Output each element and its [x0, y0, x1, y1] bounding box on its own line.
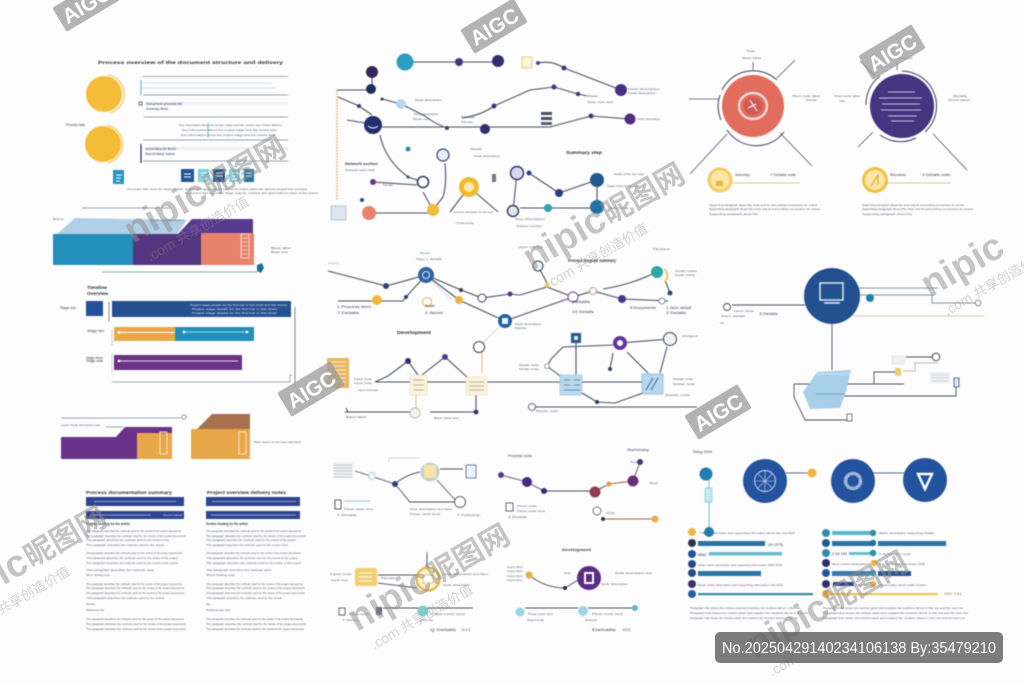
flow: upper left: Flow note text — [344, 507, 373, 511]
labels: top right: Short label — [948, 98, 971, 102]
flow: upper right: Top — [630, 460, 637, 464]
flow: lower right: Input item — [507, 565, 524, 569]
flow: lower left: Items — [421, 618, 434, 622]
chart: layered 3D block: Block note — [271, 250, 288, 254]
text column: left: This paragraph describes the methods used for the review of the — [86, 538, 169, 542]
watermark: AIGC badges: AIGC — [690, 390, 747, 437]
watermark: nipic marks: nipic — [914, 225, 1011, 306]
chart: horizontal bars — [60, 285, 295, 387]
watermark: nipic marks: 昵图网 — [421, 519, 516, 592]
list: rules and pale bands: Document process list — [146, 102, 182, 106]
list: rules and pale bands: Key information about the project stage and the review step — [182, 128, 277, 132]
text column: left: This paragraph describes the methods used for the review of the project — [86, 561, 178, 565]
labels: middle network: Node notes — [675, 273, 696, 277]
labels: top right: Short label — [742, 56, 761, 60]
text column: left: This paragraph describes the methods used for the review of the project documents — [86, 534, 186, 538]
labels: middle network: Base label — [346, 415, 366, 419]
labels: top right: Supporting paragraph about this circle and its surrounding connections for review — [709, 207, 821, 211]
heading: top-left panel: Process overview of the document structure and delivery — [98, 60, 284, 65]
list: right metrics: 1 Summary note — [879, 552, 911, 556]
list: right metrics: 2 24 102 — [832, 552, 847, 556]
watermark: nipic marks: .com — [368, 623, 402, 652]
text column: left: Section heading for the article — [86, 522, 130, 526]
text column: right: This paragraph describes the methods used for the review of the project documents — [206, 582, 303, 586]
chart: horizontal bars: Stage three — [86, 356, 103, 360]
watermark: nipic marks: 共享创造价值 — [572, 220, 650, 274]
chart: horizontal bars: Overview — [87, 291, 108, 296]
flow: lower right: Input item — [507, 574, 524, 578]
icon: yellow circle two — [85, 125, 123, 163]
labels: middle network: 7 Details — [337, 311, 359, 315]
labels: hub: Item detail — [721, 314, 746, 318]
labels: top right: Supporting paragraph about this circle and its surrounding connections for review — [862, 203, 965, 207]
diagram: blue circles row — [743, 458, 947, 503]
labels: top network: Node — [461, 115, 476, 119]
labels: top network: Outcome — [456, 221, 474, 225]
labels: middle network: Detail note — [673, 382, 696, 386]
list: left metrics — [688, 528, 813, 598]
flow: lower right: Input item — [507, 569, 524, 573]
chart: layered 3D block: Block top — [53, 217, 64, 221]
flow: lower left: Flow note — [349, 612, 369, 616]
list: rules and pale bands — [139, 76, 288, 163]
chart: lower blocks — [61, 414, 301, 459]
text column: right: Note — [206, 602, 210, 606]
labels: middle network: Details — [572, 300, 590, 304]
labels: top right: 7 Details note — [770, 173, 796, 177]
network: middle centre — [327, 245, 698, 420]
labels: middle network: Input note — [354, 381, 372, 385]
labels: top network: Node description — [474, 154, 500, 158]
chart: horizontal bars: Project stage details for the first bar in this chart — [192, 307, 277, 311]
watermark: image id pill: No.20250429140234106138 By:35479210 — [722, 640, 996, 657]
all panels — [53, 49, 984, 632]
watermark: nipic marks: 昵图网 — [197, 131, 292, 204]
text column: right: This paragraph describes the methods used for the review — [206, 596, 283, 600]
labels: top network: Node — [470, 147, 483, 151]
list: right metrics: Summary and total notes 1030 — [879, 562, 925, 566]
labels: middle network: Route note — [536, 409, 558, 413]
nodes: right route — [528, 332, 676, 410]
labels: middle network: Node note — [519, 367, 539, 371]
connectors: top network — [337, 62, 630, 213]
list: left metrics: 7 Metric description and supporting information about this row 2024 — [699, 531, 795, 535]
flow: upper left: Flow description text here — [410, 507, 452, 511]
list: right metrics: Total — [857, 583, 870, 587]
labels: hub: Item note — [734, 309, 755, 313]
connectors: upper route — [328, 266, 670, 373]
labels: top network: Node description — [637, 117, 660, 121]
flow: lower left — [330, 552, 488, 632]
text column: left: This paragraph describes the methods used for the review — [86, 543, 165, 547]
text column: left: Short closing note — [86, 573, 110, 577]
connectors: hub — [732, 288, 984, 420]
labels: top network: Network section — [345, 162, 378, 166]
flow: lower right: Details — [592, 628, 616, 632]
flow: lower right: Development — [562, 548, 592, 552]
watermark: AIGC badges — [52, 0, 926, 440]
labels: middle network: Process diagram summary — [568, 258, 616, 263]
labels: top right: Summary — [735, 173, 750, 177]
flow: lower left: Node description — [443, 583, 470, 587]
flow: upper right: Note — [606, 511, 615, 515]
text column: left: Process documentation summary — [86, 490, 173, 495]
labels: top network — [345, 87, 660, 228]
flow: lower left: Flow note text — [431, 612, 465, 616]
icons: yellow coins — [708, 167, 951, 193]
list: rules and pale bands: Secondary list items — [145, 147, 176, 151]
flow: upper right — [498, 448, 658, 522]
labels: top right: 3 Details note — [922, 173, 950, 177]
flow: lower right: Note — [564, 571, 571, 575]
chart: lower blocks: Block caption for the lower right block — [254, 440, 301, 444]
icon: blue folder shape — [803, 370, 851, 409]
watermark: nipic marks: 昵图网 — [819, 546, 914, 619]
flow: lower right: Flow note text — [592, 612, 623, 616]
panel: bottom left flows — [330, 448, 658, 632]
labels: middle network: Input summary — [358, 388, 378, 392]
labels: top network: Summary step — [566, 150, 602, 155]
paragraphs: metrics: Paragraph that closes the metrics panel and explains the numbers above in this row — [690, 616, 799, 620]
caption: under tiles — [127, 187, 319, 195]
text column: left: This paragraph describes the methods used for the review of the project documents — [86, 582, 182, 586]
labels: hub: 01 — [720, 321, 724, 325]
watermark: nipic marks: 昵图网 — [18, 501, 113, 574]
text column: right: Section heading for the article — [206, 522, 248, 526]
labels: top right: Title — [746, 49, 756, 53]
text column: right: This paragraph describes the methods used for the review of the project documents — [206, 617, 303, 621]
diagram: purple circle — [858, 61, 967, 170]
labels: middle network: Upper note text — [518, 245, 543, 249]
labels: top network: Step note text — [587, 100, 613, 104]
text column: right: This paragraph describes the methods used — [206, 568, 271, 572]
watermark: nipic marks: 共享创造价值 — [397, 581, 475, 635]
watermark: AIGC badges: AIGC — [466, 4, 523, 51]
list: right metrics: Item metric description — [832, 562, 869, 566]
watermark: nipic marks: nipic — [738, 586, 836, 667]
labels: middle network: Note — [425, 304, 435, 308]
flow: lower left: Note — [381, 576, 396, 580]
caption: under tiles: Document tiles show the stage outputs, reviews and approvals for each of the teams — [185, 191, 319, 195]
watermark: nipic marks: .com — [144, 235, 178, 264]
chart: layered 3D block — [53, 208, 291, 273]
labels: top network: Node description — [414, 112, 438, 116]
watermark: nipic marks: .com — [941, 289, 975, 318]
list: rules and pale bands: Secondary notes — [145, 152, 175, 156]
chart: horizontal bars: Timeline — [87, 285, 107, 290]
watermark: nipic marks: .com — [543, 262, 577, 291]
labels: middle network: 2 Items — [425, 311, 443, 315]
text column: right: This paragraph describes the methods used for the review of the project documents — [206, 586, 305, 590]
list: left metrics: Mid — [698, 553, 706, 557]
list: left metrics: Basic metric description and supporting information row 2020 — [698, 583, 783, 587]
flow: upper right: Summary — [627, 448, 649, 452]
text column: left: This paragraph describes the methods used for the review of the project documents — [86, 529, 181, 533]
flow: upper left — [333, 458, 481, 517]
text column: left: This paragraph describes the methods used for the review — [86, 596, 165, 600]
labels: top right: Short node label — [834, 94, 860, 98]
labels: middle network: Node notes — [675, 269, 698, 273]
labels: middle network — [328, 245, 698, 420]
flow: lower right: 302 — [622, 628, 631, 632]
flow: lower left: Q Details — [430, 628, 456, 632]
icons: top network documents — [331, 57, 552, 220]
labels: hub: 3 Details — [759, 312, 778, 316]
text column: right: This paragraph describes the methods used for the review of the project — [206, 556, 298, 560]
chart: layered 3D block: Block middle section — [150, 218, 184, 222]
nodes: upper route — [372, 261, 672, 352]
flow: lower left: Input note — [330, 572, 353, 576]
small nodes: hub — [724, 294, 981, 421]
text column: left: Reference list — [86, 608, 104, 612]
panel: top-left circles and lists — [66, 60, 319, 195]
labels: middle network: Node description — [515, 322, 541, 326]
labels: top network: Step description — [515, 217, 545, 221]
paragraphs: metrics: Paragraph that closes the metrics panel and explains the numbers above in this row and the next row — [823, 611, 969, 615]
labels: middle network: Input — [328, 261, 339, 265]
text column: left: This paragraph describes the methods used for the review of the project documents — [86, 551, 182, 555]
labels: middle network: Step 1 details — [416, 257, 443, 261]
labels: middle network: 1 Item detail — [666, 306, 691, 310]
label: circle two: Process data — [66, 123, 85, 127]
labels: middle network: Input note — [354, 377, 372, 381]
labels: top right: Supporting paragraph about this circle and its surrounding connections for review — [709, 203, 818, 207]
chart: horizontal bars: Stage note — [86, 359, 103, 363]
labels: middle network: 10 Details — [572, 310, 594, 314]
flow: lower right: Input item — [507, 578, 524, 582]
list: rules and pale bands: Key information about the project stage and the review step — [181, 133, 275, 137]
icon: yellow circle one — [86, 75, 124, 113]
flow: lower left: Node description text here — [443, 572, 488, 576]
paragraphs: metrics: Paragraph that closes the metrics panel and explains the numbers above in this row — [690, 606, 801, 610]
labels: middle network: Detail note — [665, 393, 691, 397]
labels: hub — [720, 309, 778, 325]
labels: middle network: Node note — [519, 363, 539, 367]
labels: top right: Details — [953, 94, 968, 98]
labels: top right: Review — [890, 173, 907, 177]
labels: top right: Short node label — [792, 94, 820, 98]
watermark: image id pill — [715, 632, 1003, 663]
paragraphs: metrics — [690, 606, 969, 620]
labels: top network: Detail of the middle node — [607, 184, 639, 188]
list: right metrics: Metric description supporting details — [879, 531, 935, 535]
text column: left: Notes — [86, 602, 96, 606]
labels: middle network: 5 Documents — [630, 306, 656, 310]
panel: monitor hub — [720, 268, 984, 421]
flow: upper right: Process note — [508, 454, 532, 458]
paragraphs: metrics: Paragraph that closes the metrics panel and explains the numbers above in this row — [690, 611, 809, 615]
list: left metrics: 20 CFTs — [768, 543, 783, 547]
list: rules and pale bands: Summary items — [146, 107, 168, 111]
panel: top right circles — [689, 49, 974, 216]
chart: horizontal bars: Stage one — [60, 306, 76, 310]
labels: middle network: Base label text — [434, 416, 459, 420]
paragraphs: metrics: Paragraph that closes the metrics panel and explains the numbers above in this row and the next row — [823, 606, 964, 610]
labels: middle network: 1 Process item — [337, 305, 371, 309]
labels: top right: Supporting paragraph about this — [862, 212, 913, 216]
flow: upper left: 7 Followup — [457, 513, 481, 517]
watermark: nipic marks: nipic — [516, 198, 613, 279]
connectors: right route — [532, 338, 697, 407]
labels: middle network: Notes — [653, 247, 671, 251]
watermark: AIGC badges: AIGC — [283, 367, 340, 414]
labels: top network: Note — [461, 120, 474, 124]
icons: document tiles — [113, 169, 254, 184]
paragraphs: metrics: Paragraph that closes the metrics panel and explains the numbers above in this row and the next row — [823, 616, 966, 620]
watermark: AIGC badges: AIGC — [864, 30, 921, 77]
watermark: nipic marks: .com — [766, 650, 800, 679]
chart: horizontal bars: Project stage details for the first bar in this chart and the review — [190, 303, 288, 307]
labels: middle network: Output — [682, 334, 698, 338]
chart: horizontal bars: Project stage details for the first bar in this chart — [192, 311, 277, 315]
chart: layered 3D block: Block label — [271, 246, 291, 250]
chart: horizontal bars: Stage two — [87, 329, 104, 333]
labels: top network: Step — [587, 94, 599, 98]
diagram: coral circle — [689, 60, 812, 174]
text column: right: This paragraph describes the methods used for the review of the project — [206, 538, 296, 542]
text column: left: This paragraph describes the methods used for the review of the project documents — [86, 622, 186, 626]
list: left metrics: Other metric description and supporting information 2024 1030 — [698, 563, 782, 567]
documents: lower route — [327, 354, 487, 418]
text column: right: This paragraph describes the methods used for the review of the project documents — [206, 591, 305, 595]
watermark: nipic marks: 共享创造价值 — [173, 193, 251, 247]
caption: under tiles: Document tiles show the stage outputs, reviews and approvals for each of the teams within the delivery programme overview — [127, 187, 308, 191]
labels: middle network: Development — [397, 330, 432, 335]
labels: top network: Network notes here — [345, 168, 375, 172]
chain: left column — [693, 450, 714, 537]
nodes: top network — [357, 54, 636, 220]
watermark: nipic marks: nipic — [116, 171, 214, 252]
watermark: nipic marks: nipic — [340, 559, 438, 640]
flow: lower left: 311 — [461, 628, 471, 632]
network: top centre — [331, 54, 660, 228]
flow: upper left: Flow note text — [410, 512, 440, 516]
chart: lower blocks: Lower block description text — [61, 423, 100, 427]
labels: top right: Supporting paragraph about this circle and its surrounding connections for review — [862, 207, 974, 211]
text column: left: This paragraph describes the methods used for the review of the project — [86, 556, 178, 560]
icon: monitor circle — [804, 268, 860, 324]
flow: lower right: Node description text — [615, 571, 652, 575]
text column: right: This paragraph describes the methods used for the review of the project documents — [206, 627, 304, 631]
flow: lower left: 7 Items — [342, 618, 360, 622]
labels: top right — [709, 49, 974, 216]
labels: middle network: Note — [420, 251, 431, 255]
labels: top network: Step note — [516, 224, 543, 228]
labels: top network: Note — [383, 183, 394, 187]
connectors: lower route — [345, 357, 645, 412]
list: right metrics: 000 161 — [944, 592, 962, 596]
labels: top network: Detail of the top node — [614, 172, 644, 176]
flow: upper right: Step — [649, 481, 658, 485]
flow: lower right: Node description — [601, 582, 628, 586]
labels: top right: Note — [806, 98, 818, 102]
text column: right: This paragraph describes the methods used for the review of the — [206, 543, 288, 547]
labels: top network: Base node — [609, 206, 629, 210]
text column: right: Reference list — [206, 608, 230, 612]
flow: upper right: Flow note text — [517, 509, 545, 513]
text column: left: Overview — [163, 513, 183, 517]
flow: lower right: Items — [585, 618, 598, 622]
text column: right — [206, 490, 306, 631]
text column: right: This paragraph describes the methods used for the review of the project documents — [206, 551, 301, 555]
list: right metrics: Summary and total notes — [879, 583, 927, 587]
text column: left: This paragraph describes the methods used for the review of the project documents — [86, 586, 184, 590]
text column: left — [86, 490, 186, 631]
flow: lower right: Items — [527, 618, 545, 622]
labels: top right: Short label — [895, 56, 912, 60]
labels: middle network: 2 Details — [666, 311, 686, 315]
text column: right: This paragraph describes the methods used for the review of the project documents — [206, 534, 306, 538]
labels: middle network: Detail note — [673, 377, 693, 381]
labels: top network: Node description — [628, 91, 656, 95]
labels: middle network: Note — [515, 326, 528, 330]
text column: right: This paragraph describes the methods used for the review of the project documents — [206, 529, 301, 533]
watermark: nipic marks: 昵图网 — [596, 158, 691, 231]
flow: upper right: 3 Details — [508, 515, 528, 519]
list: right metrics — [822, 529, 962, 598]
text column: right: This paragraph describes the methods used for the review of the project documents — [206, 622, 306, 626]
flow: upper right: Flow note — [517, 504, 537, 508]
text column: left: This paragraph describes the methods used — [86, 568, 154, 572]
text column: left: This paragraph describes the methods used for the review of the project documents — [86, 617, 184, 621]
flow: lower right: Flow note text — [528, 612, 553, 616]
text column: left: This paragraph describes the methods used for the review of the project documents — [86, 627, 186, 631]
panel: bottom right metrics — [688, 450, 969, 620]
labels: top network: Node note — [413, 117, 430, 121]
labels: top network: Outcome description for this step — [453, 210, 493, 214]
list: rules and pale bands: Key information about the project stage and the review step before delivery — [179, 123, 283, 127]
text column: right: Short closing note — [206, 573, 235, 577]
text column: left: This paragraph describes the methods used for the review of the project documents — [86, 591, 184, 595]
labels: top right: Note — [839, 99, 845, 103]
text column: right: This paragraph describes the methods used for the review of the project — [206, 561, 301, 565]
labels: top network: Node description — [628, 87, 660, 91]
flow: lower left: Input note — [331, 578, 348, 582]
flow: lower right — [507, 548, 652, 632]
labels: top right: Supporting paragraph about this — [709, 212, 759, 216]
chain: left column: Setup 2024 — [693, 450, 712, 454]
text column: right: Project overview delivery notes — [207, 490, 287, 495]
flow: upper left: 7 Details — [337, 513, 358, 517]
labels: top network: Node description — [415, 98, 442, 102]
